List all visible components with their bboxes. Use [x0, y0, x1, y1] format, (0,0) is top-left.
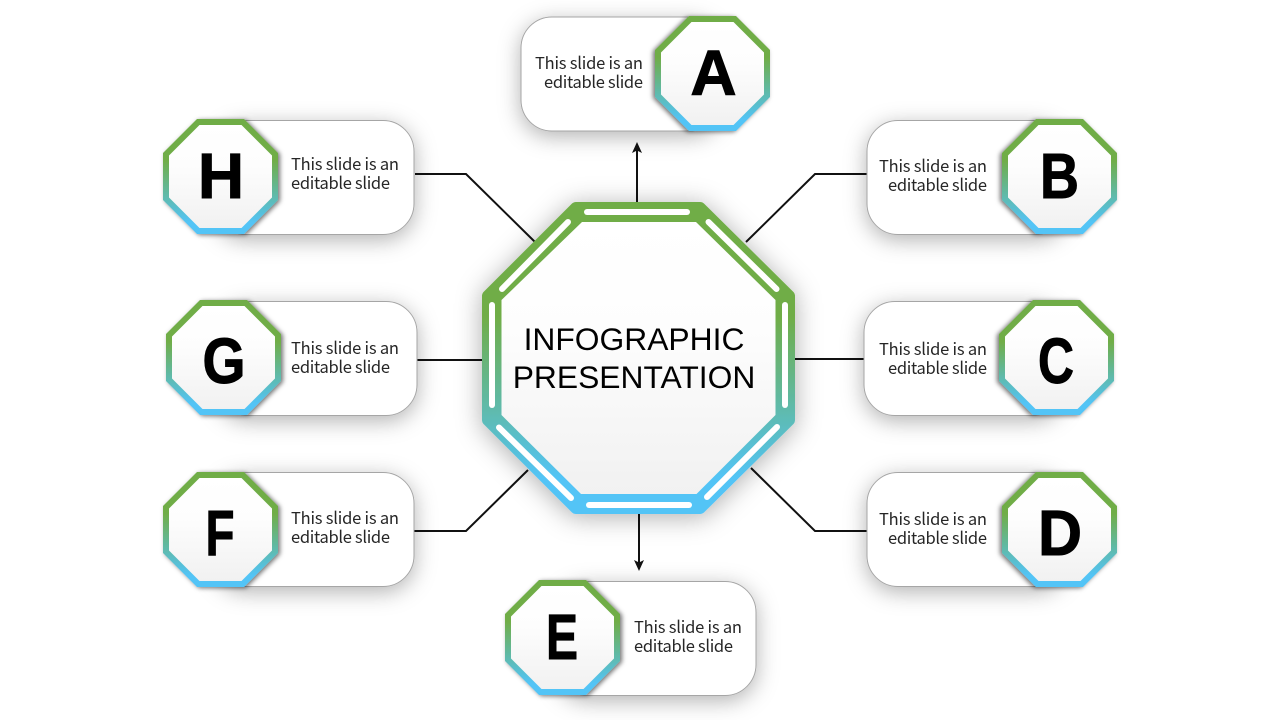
text D: editable slide	[888, 525, 987, 549]
badge F	[163, 472, 278, 587]
pill B	[867, 120, 1067, 234]
text E: editable slide	[634, 633, 733, 657]
text C: editable slide	[888, 355, 987, 379]
central title: PRESENTATION	[513, 359, 755, 395]
text F: This slide is an	[291, 505, 399, 529]
connector: H	[415, 174, 535, 242]
badge C	[999, 300, 1114, 415]
text B: This slide is an	[879, 153, 987, 177]
badge G: G	[202, 325, 246, 397]
text E: This slide is an	[634, 614, 742, 638]
card C	[864, 300, 1114, 416]
card A	[521, 16, 770, 131]
text F: editable slide	[291, 524, 390, 548]
badge E	[505, 580, 620, 695]
card D	[867, 472, 1117, 587]
central octagon	[488, 208, 789, 508]
badge A: A	[690, 37, 737, 109]
badge E: E	[546, 601, 578, 673]
text H: editable slide	[291, 170, 390, 194]
badge D: D	[1038, 497, 1082, 569]
central title: INFOGRAPHIC	[524, 321, 744, 357]
badge B: B	[1040, 140, 1079, 212]
text C: This slide is an	[879, 336, 987, 360]
badge H: H	[198, 140, 244, 212]
octagon inner face	[502, 222, 776, 494]
connector: D	[751, 468, 867, 531]
text H: This slide is an	[291, 151, 399, 175]
connector: B	[746, 174, 867, 242]
pill A	[521, 17, 721, 131]
text B: editable slide	[888, 172, 987, 196]
text A: This slide is an	[535, 50, 643, 74]
text A: editable slide	[544, 69, 643, 93]
connector: F	[414, 470, 528, 531]
badge H	[163, 119, 278, 234]
pill E	[556, 582, 756, 696]
pill H	[214, 120, 414, 234]
card H	[163, 119, 414, 234]
text G: editable slide	[291, 354, 390, 378]
pill C	[864, 302, 1064, 416]
text D: This slide is an	[879, 506, 987, 530]
arrow: up to A	[636, 146, 638, 204]
arrow: down to E	[638, 512, 640, 567]
badge B	[1002, 119, 1117, 234]
connector: C	[793, 358, 864, 360]
badge D	[1002, 472, 1117, 587]
pill D	[867, 472, 1067, 586]
card E	[505, 580, 756, 696]
connector: G	[417, 359, 484, 361]
octagon frame	[488, 208, 789, 508]
badge F: F	[206, 497, 234, 569]
pill F	[214, 472, 414, 586]
badge C: C	[1038, 325, 1074, 397]
card B	[867, 119, 1117, 234]
badge G	[166, 300, 281, 415]
pill G	[217, 302, 417, 416]
card G	[166, 300, 417, 416]
white frame segments	[492, 212, 785, 505]
text G: This slide is an	[291, 335, 399, 359]
badge A	[655, 16, 770, 131]
card F	[163, 472, 414, 587]
